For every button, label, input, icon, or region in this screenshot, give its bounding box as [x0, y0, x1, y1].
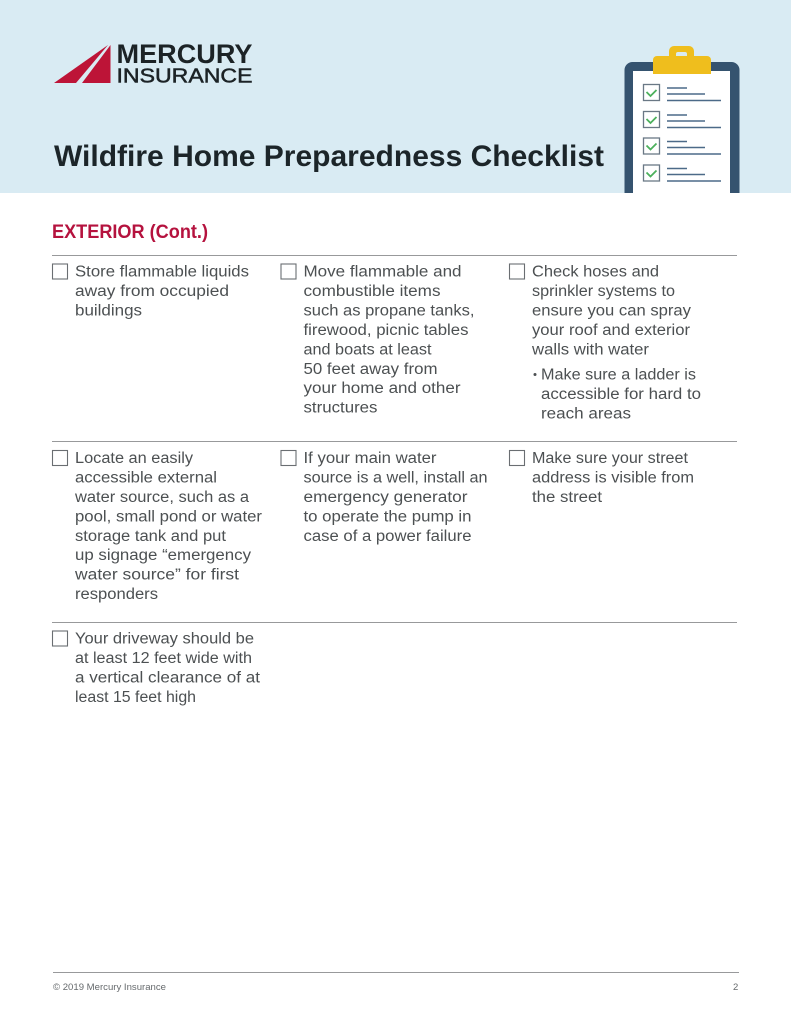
checklist item: combustible items: combustible items	[304, 283, 441, 300]
logo: Mercury Insurance	[54, 39, 253, 88]
checklist item: street address: Make sure your street	[532, 450, 689, 467]
checklist item: driveway	[52, 630, 261, 706]
checklist item: hoses and sprinklers: Make sure a ladder is	[541, 366, 696, 384]
checklist item: external water source: accessible external	[75, 470, 217, 486]
checklist item: flammable liquids	[52, 264, 249, 320]
checklist item: flammable liquids: Store flammable liquids	[75, 264, 249, 280]
checklist item: hoses and sprinklers: reach areas	[541, 406, 631, 422]
checklist item: combustible items: Move flammable and	[304, 264, 462, 280]
page number: 2	[733, 982, 738, 993]
checklist item: street address: address is visible from	[532, 470, 694, 486]
checklist item: external water source: water source, such as a	[74, 489, 249, 506]
checklist item: combustible items: such as propane tanks,	[304, 302, 474, 320]
checklist item: combustible items: firewood, picnic tables	[304, 322, 469, 339]
title: Wildfire Home Preparedness Checklist	[54, 140, 604, 173]
checklist item: combustible items	[281, 264, 474, 416]
checklist item: external water source: water source” for first	[74, 566, 240, 584]
checklist item: external water source: up signage “emergency	[75, 547, 251, 564]
logo: Mercury Insurance: MERCURY	[116, 39, 253, 69]
checklist item: well generator	[281, 450, 488, 545]
checklist item: driveway: a vertical clearance of at	[75, 670, 261, 686]
checklist item: external water source: pool, small pond or water	[75, 508, 262, 526]
checklist item: well generator: case of a power failure	[304, 528, 472, 545]
checklist item: well generator: to operate the pump in	[304, 508, 472, 526]
checklist item: hoses and sprinklers: sprinkler systems to	[532, 283, 675, 300]
checklist item: street address: the street	[532, 489, 603, 506]
checklist item: combustible items: your home and other	[304, 380, 460, 397]
checklist item: external water source: responders	[75, 586, 158, 603]
checklist item: well generator: If your main water	[304, 450, 436, 467]
checklist item: hoses and sprinklers: accessible for hard to	[541, 386, 701, 403]
checklist item: hoses and sprinklers: Check hoses and	[532, 264, 659, 280]
header band	[0, 0, 791, 193]
checklist item: street address	[510, 450, 694, 506]
checklist item: well generator: emergency generator	[304, 489, 468, 506]
checklist item: driveway: Your driveway should be	[75, 630, 254, 648]
checklist item: driveway: least 15 feet high	[75, 689, 196, 706]
checklist item: combustible items: structures	[304, 400, 378, 416]
checklist item: hoses and sprinklers: your roof and exterior	[532, 322, 690, 339]
checklist item: driveway: at least 12 feet wide with	[75, 650, 252, 667]
checklist item: well generator: source is a well, install an	[304, 470, 488, 486]
icon: clipboard	[624, 46, 740, 193]
checklist item: flammable liquids: buildings	[75, 302, 142, 320]
checklist item: flammable liquids: away from occupied	[75, 283, 229, 300]
logo: Mercury Insurance: INSURANCE	[116, 64, 252, 88]
footer copyright: © 2019 Mercury Insurance	[53, 982, 166, 993]
checklist item: hoses and sprinklers	[510, 264, 701, 422]
checklist item: hoses and sprinklers: ensure you can spray	[532, 302, 691, 320]
checklist item: external water source: storage tank and put	[75, 528, 227, 545]
checklist item: external water source: Locate an easily	[75, 450, 193, 467]
checklist item: hoses and sprinklers: walls with water	[531, 342, 649, 358]
section heading: EXTERIOR (Cont.)	[52, 222, 208, 243]
checklist item: combustible items: and boats at least	[304, 342, 432, 358]
checklist item: external water source	[52, 450, 262, 603]
checklist item: combustible items: 50 feet away from	[304, 361, 438, 378]
